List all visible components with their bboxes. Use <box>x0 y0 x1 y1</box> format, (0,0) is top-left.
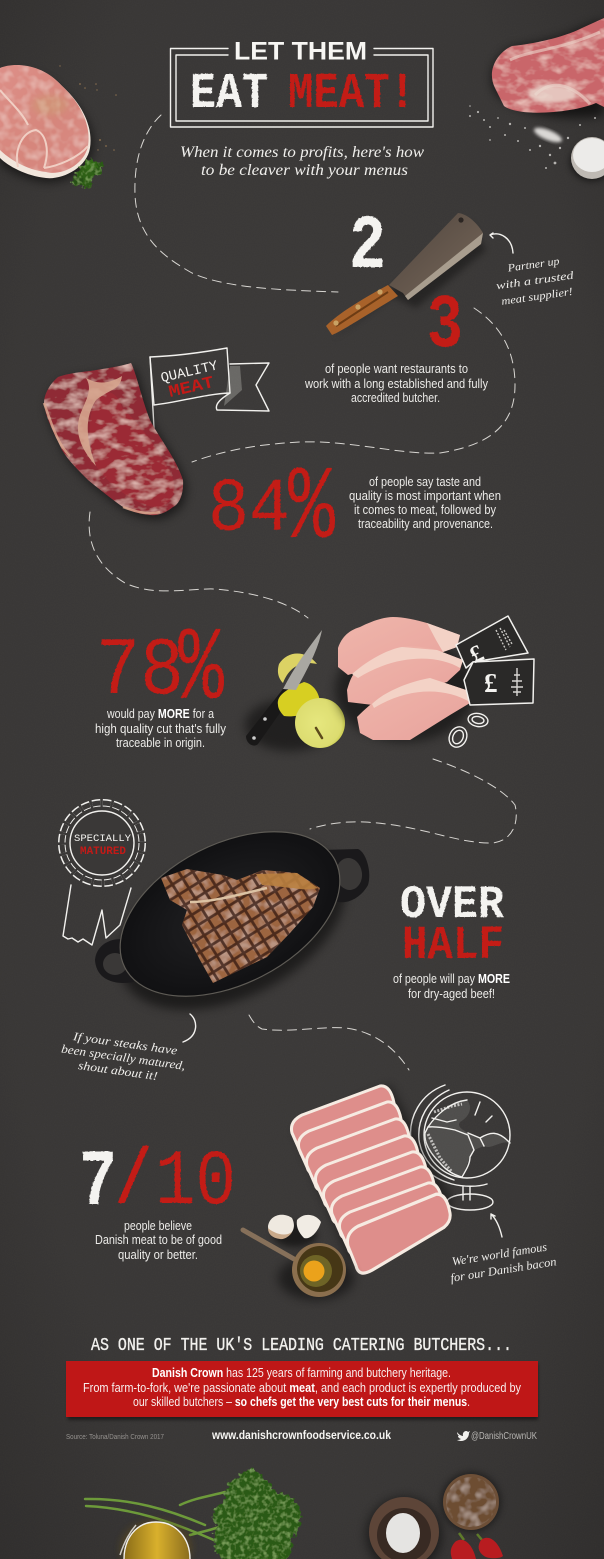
text: 2/3 stat: of people want restaurants to <box>325 362 468 376</box>
icon: globe <box>411 1085 510 1210</box>
stat 84%: % <box>288 451 335 569</box>
website url: www.danishcrownfoodservice.co.uk <box>211 1430 392 1442</box>
note: partner up: meat supplier! <box>501 286 574 308</box>
eggshells <box>268 1215 321 1247</box>
title block: MEAT! <box>288 66 415 123</box>
text: over half stat: of people will pay MORE <box>393 972 510 986</box>
icon: banknotes and coins <box>446 616 534 750</box>
dashed line 1 <box>135 115 338 292</box>
stat 84%: 84 <box>208 467 290 553</box>
icon: quality meat flag: MEAT <box>167 374 216 403</box>
text: 78% stat: would pay MORE for a <box>106 707 214 721</box>
stat 7/10: 10 <box>155 1139 236 1227</box>
stat 78%: % <box>178 612 224 730</box>
crumbs <box>59 65 117 151</box>
title block: EAT <box>190 66 268 123</box>
stat 7/10 <box>79 1138 236 1229</box>
text: 78% stat <box>95 707 227 750</box>
number 3: 3 <box>427 283 463 369</box>
stat 78%: 78 <box>96 625 184 718</box>
text: over half stat <box>393 972 510 1001</box>
text: 7/10 stat: quality or better. <box>118 1248 198 1262</box>
note: partner up: Partner up <box>506 255 561 275</box>
stat 84% <box>208 451 335 569</box>
icon: quality meat flag: QUALITY <box>159 358 220 387</box>
text: 2/3 stat: work with a long established and fully <box>304 377 489 391</box>
note: specially matured: If your steaks have <box>71 1029 179 1058</box>
cast iron pan with T-bone steak <box>91 798 373 1045</box>
twitter handle: @DanishCrownUK <box>471 1431 537 1442</box>
salt bowl <box>366 1497 442 1559</box>
source note: Source: Toluna/Danish Crown 2017 <box>66 1434 164 1441</box>
note: world famous <box>447 1239 557 1285</box>
twitter handle <box>457 1431 537 1442</box>
stat 78% <box>96 612 224 730</box>
icon: specially matured rosette: SPECIALLY <box>74 834 131 845</box>
title block <box>170 38 433 127</box>
icon: specially matured rosette: MATURED <box>80 846 126 858</box>
stat 7/10: 7 <box>79 1138 117 1229</box>
arrow: bacon note <box>491 1214 502 1237</box>
icon: cleaver <box>326 213 486 340</box>
text: 7/10 stat: Danish meat to be of good <box>95 1233 222 1247</box>
text: 2/3 stat <box>304 362 489 405</box>
heading: catering butchers: AS ONE OF THE UK'S LEADING CATERING BUTCHERS... <box>91 1336 512 1356</box>
icon: banknotes and coins: £ <box>466 640 488 669</box>
olive oil jar <box>120 1520 192 1559</box>
stat 7/10: / <box>115 1138 152 1226</box>
ribeye steak <box>44 363 186 519</box>
text: over half stat: for dry-aged beef! <box>408 987 495 1001</box>
text: 84% stat: it comes to meat, followed by <box>354 503 497 517</box>
icon: quality meat flag <box>150 348 269 428</box>
text: 7/10 stat <box>95 1219 222 1262</box>
knife and peeled apple <box>245 630 345 751</box>
text: 7/10 stat: people believe <box>124 1219 192 1233</box>
text: 84% stat: of people say taste and <box>369 475 481 489</box>
note: specially matured: shout about it! <box>77 1058 159 1083</box>
dashed line 3 <box>89 512 308 618</box>
dashed line 5 <box>249 1015 409 1070</box>
note: specially matured <box>59 1028 188 1087</box>
note: world famous: We're world famous <box>451 1240 548 1268</box>
parsley garnish <box>72 159 103 188</box>
text: 78% stat: traceable in origin. <box>116 736 205 750</box>
heading: over half <box>400 879 504 973</box>
bacon slices <box>291 1085 455 1273</box>
wooden bowl <box>441 1472 501 1532</box>
egg in copper pan <box>243 1230 354 1300</box>
text: 84% stat: quality is most important when <box>349 489 501 503</box>
note: partner up <box>493 254 577 308</box>
parsley bunch bottom <box>85 1469 301 1559</box>
arrow: supplier note <box>490 233 513 253</box>
subtitle: to be cleaver with your menus <box>201 162 408 179</box>
panel: red message box: From farm-to-fork, we're passionate about meat, and each product is expertly produced by <box>83 1381 522 1395</box>
title block: LET THEM <box>234 38 367 66</box>
icon: specially matured rosette <box>62 803 142 945</box>
subtitle <box>180 144 424 179</box>
note: specially matured: been specially matured, <box>60 1042 186 1073</box>
raw meat top right <box>492 18 604 118</box>
note: world famous: for our Danish bacon <box>449 1254 557 1285</box>
pork chops <box>335 617 475 742</box>
dashed line 2 <box>192 308 515 462</box>
arrow: matured note <box>183 1014 196 1042</box>
panel: red message box: our skilled butchers – so chefs get the very best cuts for their menus. <box>133 1395 470 1409</box>
text: 2/3 stat: accredited butcher. <box>351 391 440 405</box>
panel: red message box <box>66 1361 538 1420</box>
heading: over half: HALF <box>402 920 504 973</box>
text: 78% stat: high quality cut that's fully <box>95 722 227 736</box>
number 2: 2 <box>349 204 386 290</box>
icon: banknotes and coins: £ <box>484 668 498 698</box>
heading: over half: OVER <box>400 879 504 931</box>
text: 84% stat <box>349 475 501 531</box>
subtitle: When it comes to profits, here's how <box>180 144 424 161</box>
panel: red message box: Danish Crown has 125 years of farming and butchery heritage. <box>152 1366 451 1380</box>
text: 84% stat: traceability and provenance. <box>358 517 493 531</box>
dashed line 4 <box>310 759 516 843</box>
chilli peppers <box>451 1533 503 1559</box>
note: partner up: with a trusted <box>495 270 575 292</box>
pork steak top left <box>0 65 93 182</box>
salt and spoon <box>469 105 604 181</box>
